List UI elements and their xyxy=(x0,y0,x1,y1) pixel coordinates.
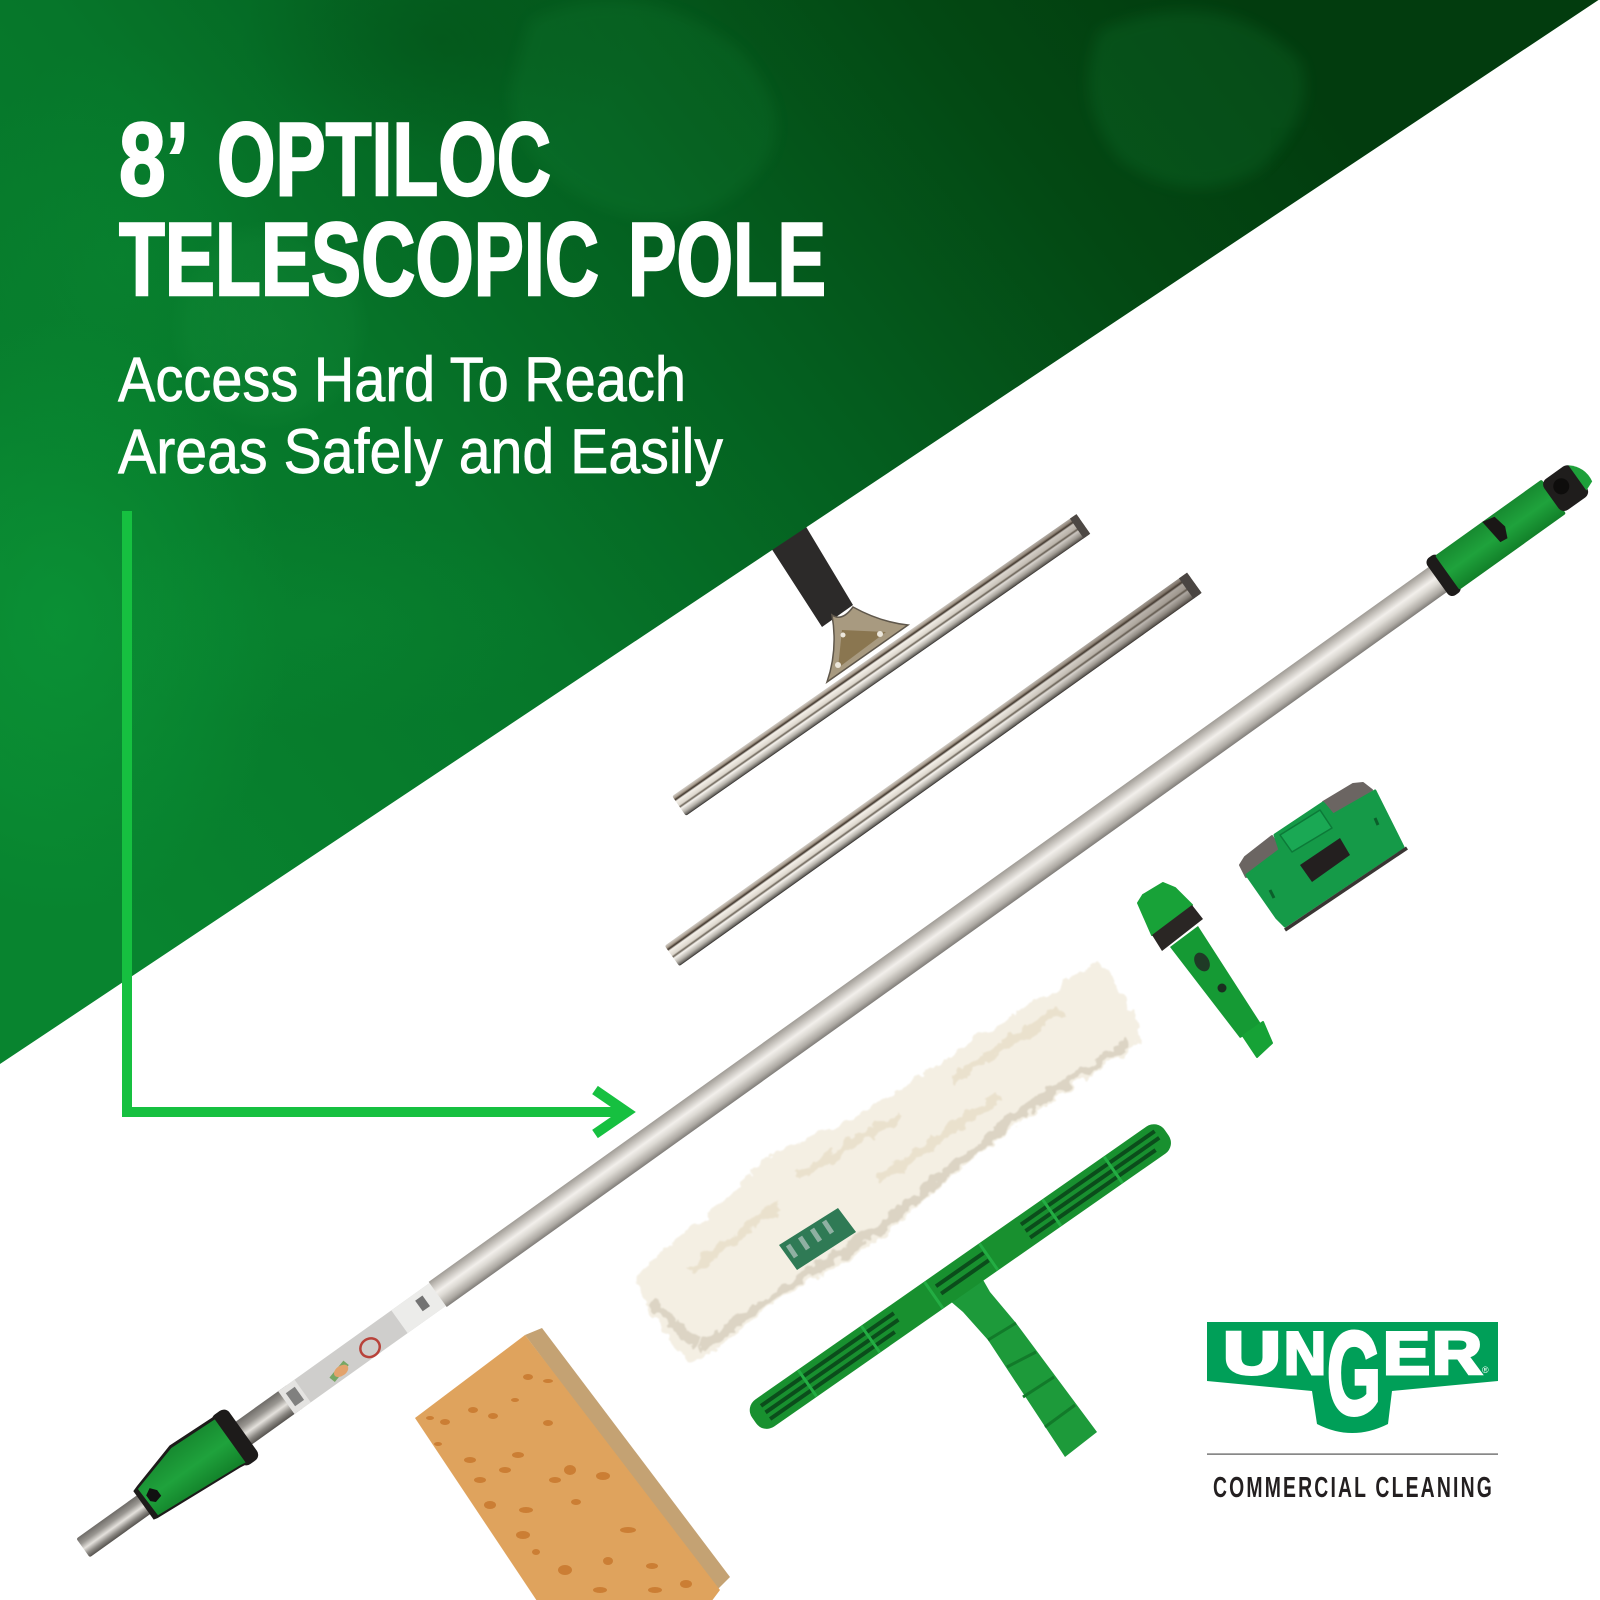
upper green grip xyxy=(1424,454,1600,598)
product: green T-bar xyxy=(745,1119,1176,1457)
registered mark: ® xyxy=(1482,1365,1489,1375)
bracket rivets xyxy=(835,631,883,668)
arrow pointing to the pole xyxy=(127,511,628,1134)
sleeve pile xyxy=(635,964,1143,1364)
title xyxy=(119,102,826,318)
subtitle: Areas Safely and Easily xyxy=(118,417,723,487)
T-bar handle xyxy=(949,1278,1097,1457)
steel bracket xyxy=(827,607,908,682)
T-bar crossbar xyxy=(745,1119,1176,1434)
sponge side xyxy=(525,1328,730,1590)
logo wordmark xyxy=(1223,1308,1482,1440)
long main tube xyxy=(429,561,1455,1307)
product: orange sponge xyxy=(415,1328,730,1600)
sponge face xyxy=(415,1335,720,1600)
logo: Unger xyxy=(1207,1308,1498,1504)
product: white washer sleeve xyxy=(635,964,1143,1364)
logo wordmark: N xyxy=(1284,1320,1326,1387)
product: second squeegee channel xyxy=(665,573,1202,966)
logo divider xyxy=(1207,1454,1498,1455)
logo tagline: COMMERCIAL CLEANING xyxy=(1213,1472,1492,1504)
lower narrow tube xyxy=(76,1486,163,1557)
logo badge xyxy=(1207,1322,1498,1433)
title: TELESCOPIC xyxy=(119,202,599,318)
product: telescopic pole xyxy=(64,446,1600,1572)
bracket brass plate xyxy=(838,630,886,668)
logo wordmark: R xyxy=(1432,1320,1482,1387)
product: scraper head xyxy=(1240,783,1407,930)
channel one xyxy=(672,514,1090,816)
logo wordmark: G xyxy=(1327,1308,1381,1440)
logo wordmark: E xyxy=(1383,1320,1430,1387)
title: OPTILOC xyxy=(217,102,551,218)
printed label xyxy=(278,1283,446,1414)
title: 8’ xyxy=(119,102,189,218)
sleeve tag xyxy=(779,1208,856,1270)
product: locking cone adapter xyxy=(1138,883,1272,1057)
logo wordmark: U xyxy=(1223,1320,1281,1387)
title: POLE xyxy=(628,202,826,318)
product: squeegee with handle and channel xyxy=(672,514,1090,816)
subtitle xyxy=(118,345,723,487)
lower green grip xyxy=(124,1406,261,1529)
subtitle: Access Hard To Reach xyxy=(118,345,686,415)
black squeegee handle sleeve xyxy=(753,520,853,627)
mid tube xyxy=(217,1385,303,1458)
panel: green diagonal background xyxy=(0,0,1600,1064)
sponge pores xyxy=(426,1374,692,1593)
